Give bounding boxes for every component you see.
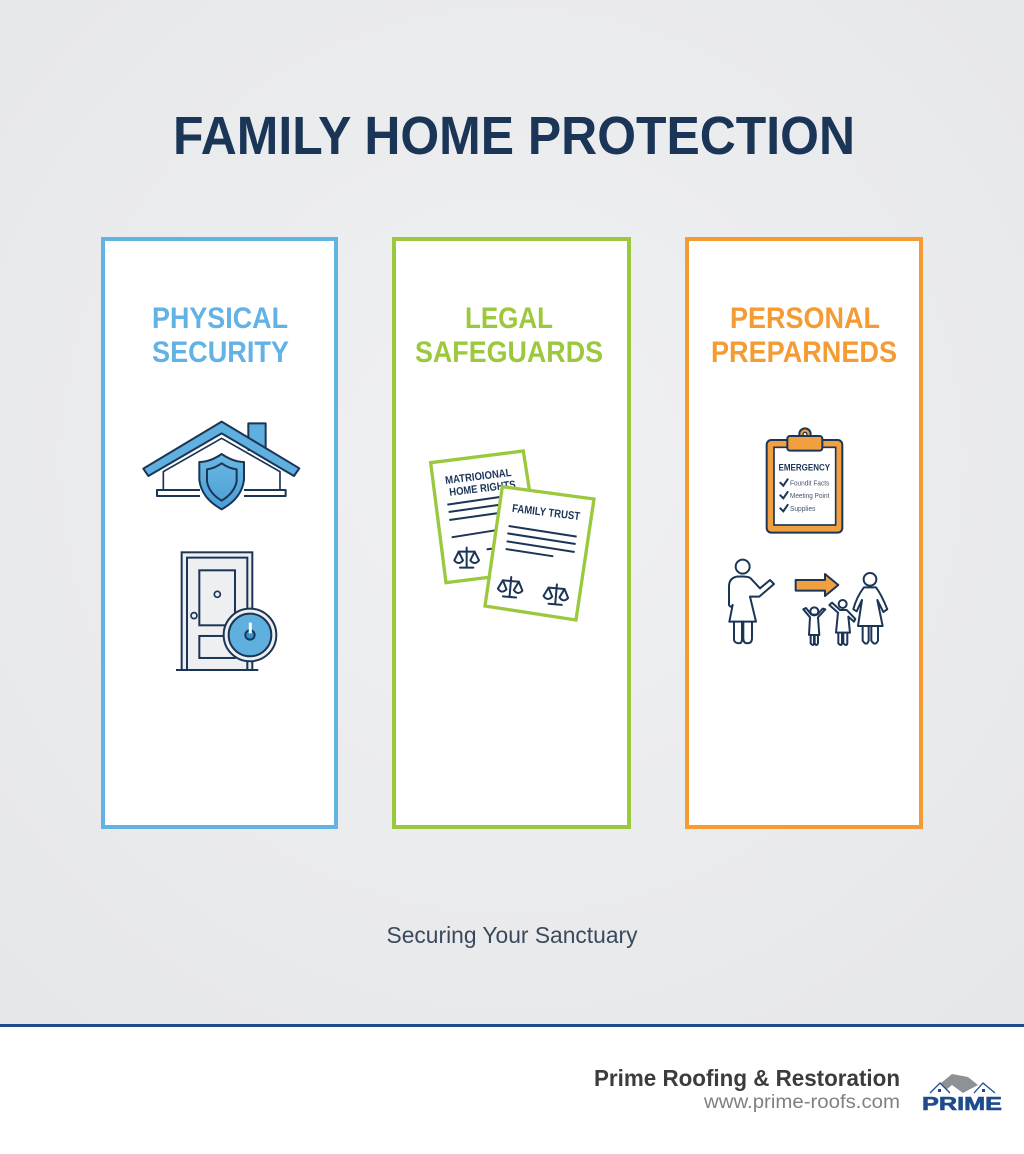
icon: emergency clipboard xyxy=(767,428,842,533)
subtitle: Securing Your Sanctuary xyxy=(386,922,638,948)
logo: prime: PRIME xyxy=(922,1094,1002,1114)
icon: house with shield xyxy=(143,422,299,509)
panel: personal preparedness xyxy=(687,239,921,827)
icon: family trust document xyxy=(485,487,594,620)
icon: emergency clipboard: Meeting Point xyxy=(790,491,829,500)
footer xyxy=(0,1024,1024,1154)
logo: prime xyxy=(922,1074,1002,1114)
icon: door with smart lock xyxy=(176,552,276,670)
panel: legal safeguards xyxy=(394,239,629,827)
icon: emergency clipboard: EMERGENCY xyxy=(778,463,830,473)
heading: legal safeguards xyxy=(415,302,603,369)
heading: personal preparedness: PERSONAL xyxy=(730,302,880,335)
icon: matrimonial home rights document: MATRIOIONAL xyxy=(445,467,512,487)
heading: physical security xyxy=(152,302,289,369)
icon: adult guiding family xyxy=(729,560,887,645)
heading: personal preparedness xyxy=(711,302,897,369)
title: FAMILY HOME PROTECTION xyxy=(173,106,855,166)
icon: matrimonial home rights document xyxy=(431,451,542,583)
arrow xyxy=(796,574,838,596)
icon: family trust document: FAMILY TRUST xyxy=(511,503,581,523)
heading: personal preparedness: PREPARNEDS xyxy=(711,336,897,369)
heading: legal safeguards: SAFEGUARDS xyxy=(415,336,603,369)
heading: legal safeguards: LEGAL xyxy=(465,302,553,335)
panel: physical security xyxy=(103,239,336,827)
icon: emergency clipboard: Supplies xyxy=(790,504,816,513)
website: www.prime-roofs.com xyxy=(703,1092,900,1113)
company name: Prime Roofing & Restoration xyxy=(594,1065,900,1091)
icon: emergency clipboard: Foundit Facts xyxy=(790,478,830,487)
icon: matrimonial home rights document: HOME RIGHTS xyxy=(449,479,516,499)
heading: physical security: PHYSICAL xyxy=(152,302,288,335)
heading: physical security: SECURITY xyxy=(152,336,289,369)
